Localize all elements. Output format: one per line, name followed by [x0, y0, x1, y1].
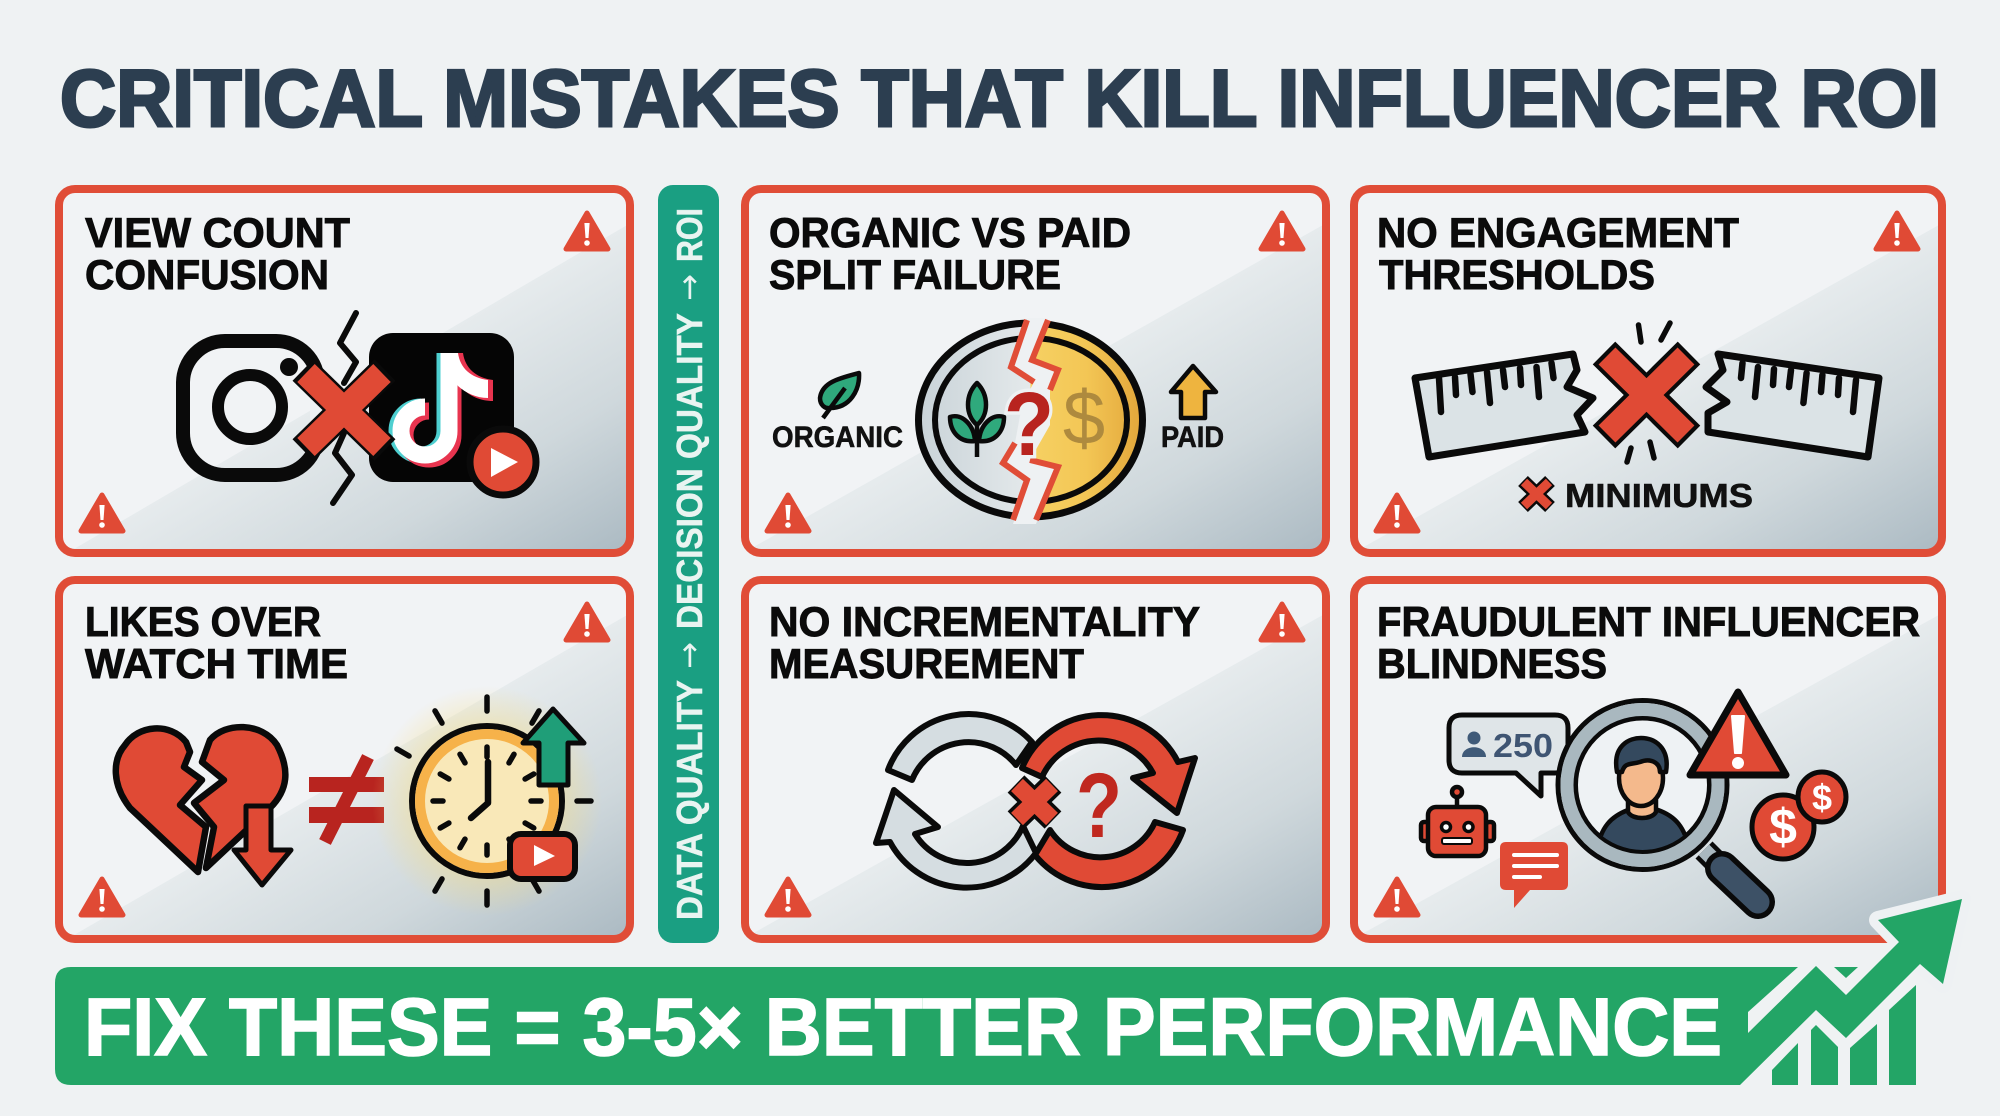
icon: broken loop arrows: [876, 714, 1195, 888]
heading: no engagement thresholds: NO ENGAGEMENT: [1377, 209, 1739, 256]
icon: not equal sign: [309, 757, 384, 842]
icon: robot: [1421, 787, 1494, 856]
heading: fraudulent influencer blindness: FRAUDULENT INFLUENCER: [1377, 598, 1920, 645]
panel: likes over watch time: [55, 576, 634, 943]
icon: large warning triangle: [1690, 692, 1786, 775]
icon: split coin: [918, 318, 1142, 524]
icon: warning top right: [1261, 604, 1303, 640]
icon: video badge: [510, 834, 575, 879]
icon: impact sparks: [1627, 323, 1670, 462]
small green notch: [1834, 967, 1858, 978]
side bar: data quality to roi: →: [670, 274, 708, 301]
icon: warning bottom left: [81, 495, 123, 531]
icon: broken heart: [116, 727, 285, 872]
side bar: data quality to roi: ROI: [669, 208, 710, 262]
icon: red down arrow: [234, 806, 291, 885]
banner shape with growth arrow: [55, 899, 1962, 1085]
dollar sign: $: [1063, 376, 1105, 461]
side bar: data quality to roi: DATA QUALITY: [669, 680, 710, 920]
icon: warning bottom left: [1376, 879, 1418, 915]
heading: likes over watch time: LIKES OVER: [85, 598, 321, 645]
icon: instagram logo: [183, 341, 334, 475]
icon: play badge: [470, 429, 536, 495]
panel: no engagement thresholds: [1350, 185, 1946, 557]
panel: view count confusion: [55, 185, 634, 557]
icon: dollar coins: $: [1769, 799, 1797, 855]
icon: warning bottom left: [1376, 495, 1418, 531]
panel: no incrementality measurement: [741, 576, 1330, 943]
heading: view count confusion: CONFUSION: [85, 251, 329, 298]
growth bars: [1772, 985, 1916, 1085]
icon: speech bubble with follower count: 250: [1493, 727, 1553, 764]
icon: sprout: [950, 383, 1004, 457]
heading: view count confusion: [85, 209, 350, 298]
icon: red chat bubble: [1500, 842, 1568, 908]
icon: small cross: [1523, 481, 1550, 507]
icon: warning bottom left: [81, 879, 123, 915]
heading: likes over watch time: WATCH TIME: [85, 640, 348, 687]
icon: leaf: [820, 373, 859, 418]
question mark: ?: [1004, 375, 1054, 475]
heading: no incrementality measurement: MEASUREMENT: [769, 640, 1084, 687]
icon: clock with glow: [372, 686, 602, 916]
side bar: data quality to roi: DECISION QUALITY: [669, 313, 710, 629]
crack: [1003, 318, 1058, 524]
heading: no engagement thresholds: [1377, 209, 1739, 298]
label: minimums: MINIMUMS: [1565, 477, 1753, 514]
icon: crack lines: [333, 313, 356, 503]
panel: organic vs paid split failure: [741, 185, 1330, 557]
arrowhead halo: [1878, 899, 1962, 984]
side bar: data quality to roi: →: [670, 642, 708, 669]
icon: red cross: [303, 370, 385, 450]
icon: warning top right: [566, 213, 608, 249]
heading: no engagement thresholds: THRESHOLDS: [1379, 251, 1655, 298]
icon: tiktok logo: [369, 333, 514, 482]
heading: view count confusion: VIEW COUNT: [85, 209, 350, 256]
banner: fix these: [55, 899, 1962, 1085]
icon: green up arrow: [523, 709, 584, 785]
heading: fraudulent influencer blindness: BLINDNESS: [1377, 640, 1607, 687]
heading: no incrementality measurement: NO INCREMENTALITY: [769, 598, 1200, 645]
heading: no incrementality measurement: [769, 598, 1200, 687]
icon: warning top right: [1876, 213, 1918, 249]
icon: broken ruler right: [1706, 354, 1879, 457]
side bar: data quality to roi: [658, 185, 719, 943]
panel: fraudulent influencer blindness: [1350, 576, 1946, 943]
icon: warning bottom left: [767, 879, 809, 915]
icon: warning top right: [566, 604, 608, 640]
icon: speech bubble with follower count: [1449, 715, 1568, 796]
question mark: ?: [1076, 755, 1122, 857]
banner text: FIX THESE = 3-5× BETTER PERFORMANCE: [84, 982, 1722, 1073]
icon: warning top right: [1261, 213, 1303, 249]
icon: broken ruler left: [1415, 354, 1593, 457]
label: paid: PAID: [1161, 421, 1224, 454]
heading: fraudulent influencer blindness: [1377, 598, 1920, 687]
title: CRITICAL MISTAKES THAT KILL INFLUENCER ROI: [60, 54, 1939, 144]
icon: gold up arrow: [1171, 366, 1216, 418]
label: organic: ORGANIC: [772, 421, 903, 454]
heading: organic vs paid split failure: [769, 209, 1131, 298]
icon: dollar coins: $: [1812, 777, 1832, 818]
icon: warning bottom left: [767, 495, 809, 531]
icon: magnifying glass with person: [1558, 700, 1758, 902]
icon: dollar coins: [1752, 772, 1846, 859]
icon: red cross: [1604, 353, 1689, 437]
heading: organic vs paid split failure: ORGANIC VS PAID: [769, 209, 1131, 256]
heading: likes over watch time: [85, 598, 348, 687]
heading: organic vs paid split failure: SPLIT FAILURE: [769, 251, 1061, 298]
